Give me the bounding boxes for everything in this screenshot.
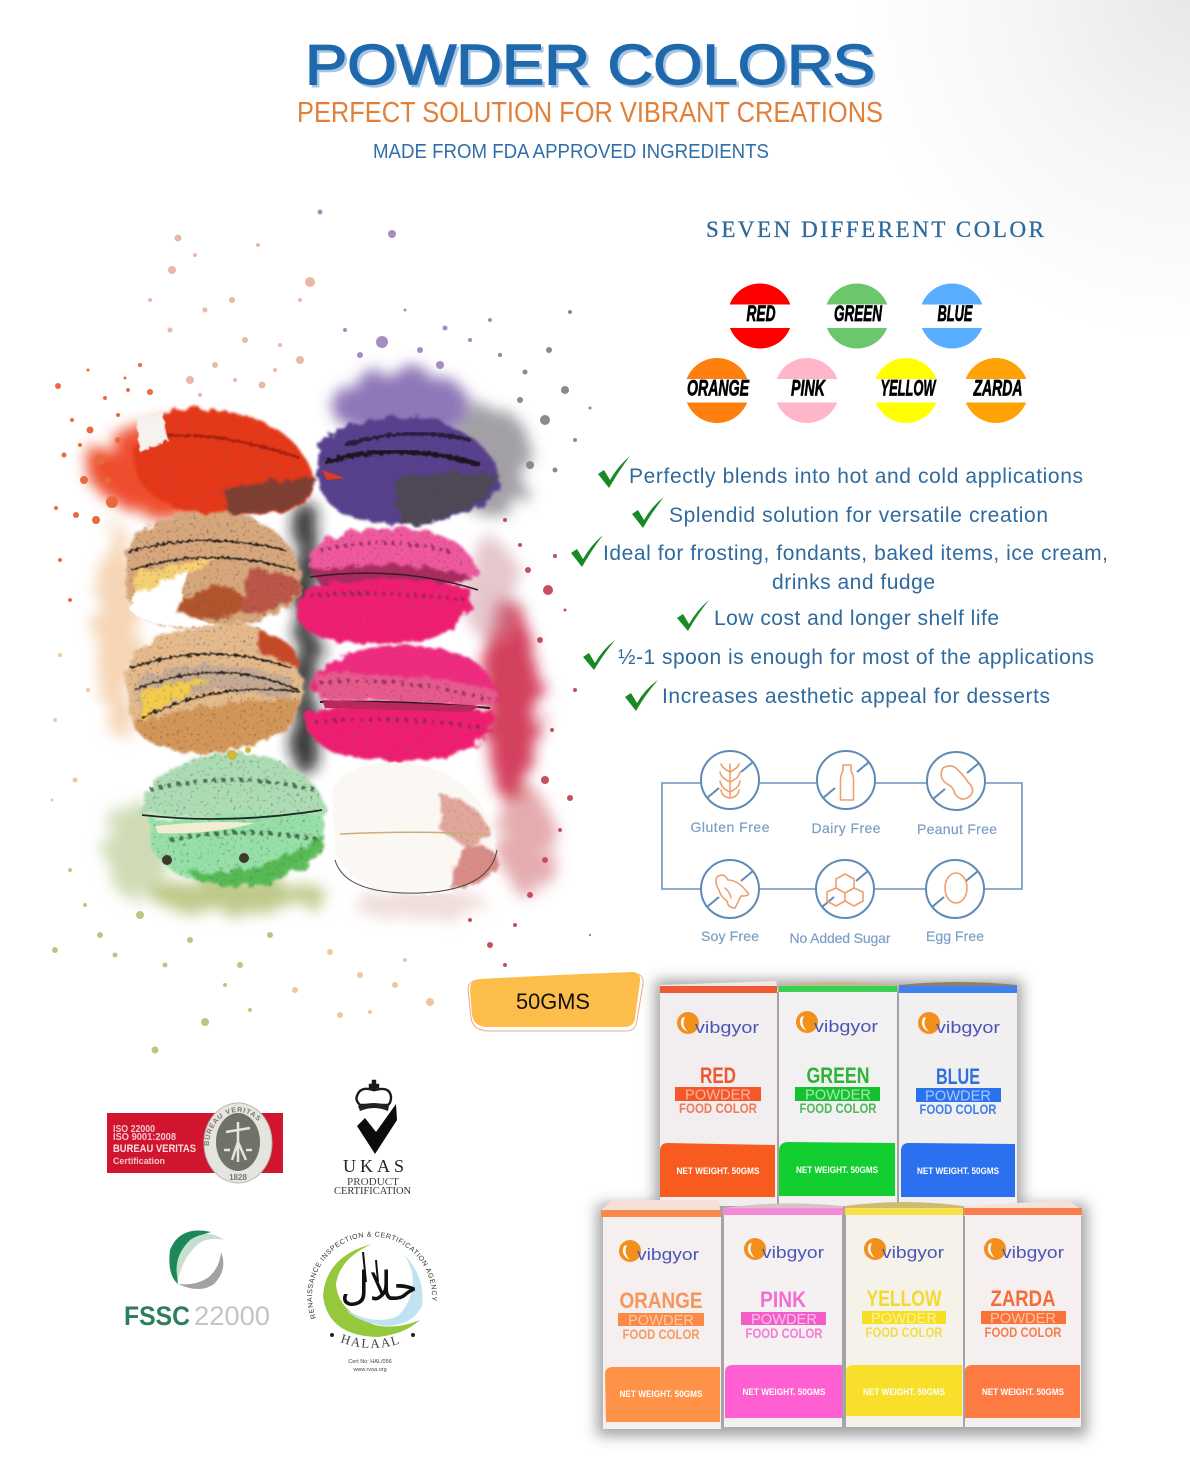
- box: pink: POWDER: [751, 1311, 817, 1328]
- box: zarda: [964, 1200, 1082, 1427]
- soy free: [701, 860, 759, 944]
- soy free: Soy Free: [701, 928, 759, 944]
- benefit 1: Perfectly blends into hot and cold applications: [629, 465, 1083, 488]
- box: zarda: POWDER: [990, 1310, 1056, 1327]
- badge: 50GMS: [468, 972, 643, 1031]
- bureau veritas logo: ISO 22000: [113, 1124, 155, 1135]
- bureau veritas logo: BUREAU VERITAS: [113, 1143, 196, 1155]
- benefit 3: Ideal for frosting, fondants, baked items, ice cream,: [603, 542, 1108, 565]
- bureau veritas logo: 1828: [229, 1173, 247, 1182]
- box: blue: FOOD COLOR: [920, 1101, 996, 1117]
- box: green: vibgyor: [814, 1017, 878, 1036]
- box: pink: PINK: [760, 1287, 806, 1312]
- free-from panel: [662, 751, 1022, 946]
- halal logo: www.rvoa.org: [352, 1367, 387, 1373]
- box: blue: POWDER: [925, 1088, 991, 1104]
- tagline: MADE FROM FDA APPROVED INGREDIENTS: [373, 141, 769, 163]
- box: pink: FOOD COLOR: [746, 1325, 822, 1341]
- box: yellow: POWDER: [871, 1310, 937, 1327]
- box: yellow: YELLOW: [866, 1286, 942, 1311]
- box: red: FOOD COLOR: [679, 1100, 757, 1116]
- swatch: pink: [772, 358, 842, 423]
- macaron: green: [140, 747, 328, 886]
- swatch: yellow: YELLOW: [880, 376, 937, 400]
- benefit 6: Increases aesthetic appeal for desserts: [662, 685, 1050, 708]
- halal logo: Cert No: HAL/056: [348, 1359, 392, 1365]
- swatch: green: GREEN: [834, 301, 883, 326]
- box: red: NET WEIGHT. 50GMS: [676, 1166, 760, 1176]
- ukas logo: PRODUCT: [347, 1177, 399, 1188]
- macaron: pink bottom: [303, 646, 497, 761]
- swatch: orange: [682, 358, 752, 423]
- box: orange: FOOD COLOR: [622, 1326, 700, 1342]
- box: orange: NET WEIGHT. 50GMS: [620, 1389, 702, 1399]
- box: green: FOOD COLOR: [800, 1100, 876, 1116]
- fssc 22000 logo: 22000: [194, 1301, 270, 1331]
- icon: check: [625, 680, 658, 711]
- benefit 2: Splendid solution for versatile creation: [669, 504, 1048, 527]
- box: yellow: FOOD COLOR: [866, 1324, 942, 1340]
- subtitle: PERFECT SOLUTION FOR VIBRANT CREATIONS: [297, 97, 883, 129]
- box: green: [779, 982, 897, 1206]
- swatch: red: [725, 284, 795, 348]
- heading: seven different color: SEVEN DIFFERENT COLOR: [706, 217, 1045, 242]
- box: zarda: NET WEIGHT. 50GMS: [982, 1387, 1064, 1397]
- swatch: green: [822, 284, 892, 348]
- icon: check: [583, 640, 615, 670]
- icon: check: [677, 600, 709, 631]
- box: blue: BLUE: [936, 1064, 980, 1089]
- halal logo: حلال: [340, 1264, 418, 1310]
- box: orange: [601, 1200, 721, 1429]
- macaron: tan top: [127, 512, 303, 628]
- box: red: [660, 981, 778, 1206]
- halal logo: RENAISSANCE INSPECTION & CERTIFICATION AGENCY: [307, 1232, 437, 1320]
- box: green: NET WEIGHT. 50GMS: [796, 1165, 878, 1175]
- box: yellow: vibgyor: [882, 1243, 944, 1262]
- macaron: pink top: [297, 528, 478, 643]
- bureau veritas logo: Certification: [113, 1156, 165, 1166]
- ukas logo: CERTIFICATION: [334, 1186, 411, 1197]
- swatch: pink: PINK: [791, 376, 826, 400]
- halal logo: [307, 1232, 437, 1373]
- macaron: white: [332, 762, 499, 895]
- ukas logo: [334, 1081, 411, 1197]
- benefit 4: Low cost and longer shelf life: [714, 607, 999, 630]
- bureau veritas logo: ISO 9001:2008: [113, 1132, 176, 1143]
- box: zarda: FOOD COLOR: [984, 1324, 1062, 1340]
- dairy free: [812, 751, 881, 836]
- box: orange: ORANGE: [620, 1288, 702, 1313]
- fssc 22000 logo: FSSC: [124, 1301, 190, 1331]
- swatch: red: RED: [746, 301, 776, 326]
- box: orange: vibgyor: [637, 1245, 699, 1264]
- swatch: zarda: [961, 358, 1031, 423]
- benefit 5: ½-1 spoon is enough for most of the applications: [618, 646, 1094, 669]
- box: red: POWDER: [685, 1086, 751, 1104]
- color swatches: [682, 284, 1031, 423]
- box shadows: [597, 980, 1087, 1436]
- icon: check: [632, 497, 664, 528]
- box: zarda: vibgyor: [1002, 1243, 1064, 1262]
- box: pink: [723, 1203, 843, 1427]
- egg free: [926, 860, 984, 944]
- box: blue: [899, 982, 1017, 1206]
- box: zarda: ZARDA: [990, 1286, 1056, 1311]
- ukas logo: UKAS: [343, 1156, 404, 1176]
- box: blue: NET WEIGHT. 50GMS: [917, 1166, 999, 1176]
- macaron: red: [135, 408, 316, 516]
- no added sugar: [790, 860, 891, 946]
- fssc 22000 logo: [124, 1230, 270, 1331]
- box: red: RED: [700, 1063, 736, 1088]
- box: yellow: NET WEIGHT. 50GMS: [863, 1387, 945, 1397]
- certifications: [107, 1080, 437, 1373]
- halal logo: HALAAL: [340, 1334, 399, 1348]
- benefits list: [571, 456, 1108, 711]
- no added sugar: No Added Sugar: [790, 930, 891, 946]
- watercolor macarons illustration: [50, 210, 592, 1054]
- box: blue: vibgyor: [936, 1018, 1000, 1037]
- box: red: vibgyor: [695, 1018, 759, 1037]
- swatch: yellow: [871, 358, 941, 423]
- peanut free: [917, 752, 997, 837]
- badge: 50GMS: 50GMS: [516, 989, 590, 1014]
- bureau veritas logo: [107, 1102, 283, 1184]
- benefit 3 continued: drinks and fudge: [772, 571, 935, 594]
- peanut free: Peanut Free: [917, 821, 997, 837]
- paint wash background: [90, 370, 551, 919]
- title: POWDER COLORS: [308, 36, 878, 100]
- swatch: blue: BLUE: [938, 301, 973, 326]
- dairy free: Dairy Free: [812, 820, 881, 836]
- swatch: orange: ORANGE: [687, 376, 750, 400]
- swatch: blue: [917, 284, 987, 348]
- box: orange: POWDER: [628, 1312, 694, 1329]
- product boxes: [597, 980, 1087, 1436]
- swatch: zarda: ZARDA: [973, 376, 1022, 400]
- icon: check: [571, 535, 603, 567]
- bureau veritas logo: BUREAU VERITAS: [204, 1107, 261, 1146]
- box: green: GREEN: [806, 1063, 870, 1088]
- gluten free: Gluten Free: [690, 819, 770, 835]
- paint splatter: [50, 210, 592, 1054]
- egg free: Egg Free: [926, 928, 984, 944]
- gluten free: [690, 751, 770, 835]
- icon: check: [598, 456, 630, 488]
- macaron: tan bottom: [127, 623, 303, 753]
- title: POWDER COLORS: [305, 33, 875, 97]
- box: yellow: [845, 1202, 963, 1427]
- macaron: purple: [318, 417, 500, 524]
- box: green: POWDER: [805, 1086, 871, 1104]
- box: pink: vibgyor: [762, 1243, 824, 1262]
- box: pink: NET WEIGHT. 50GMS: [742, 1387, 826, 1397]
